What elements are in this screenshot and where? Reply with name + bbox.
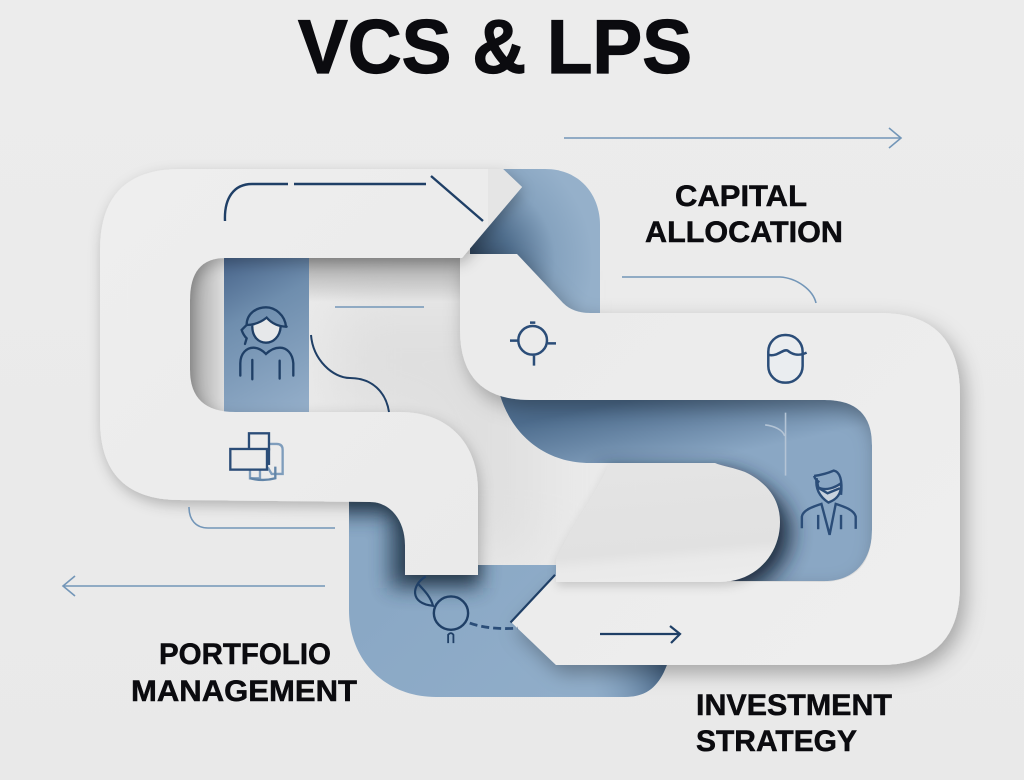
icon: businessman [802, 471, 856, 535]
label: capital allocation [645, 180, 843, 249]
icon: overlapping boxes [230, 433, 283, 480]
title: VCS & LPS [298, 5, 692, 90]
label: investment strategy [696, 689, 892, 758]
panel: white tongue [556, 463, 780, 582]
icon: target [510, 323, 556, 366]
arrow: inside lower band [600, 626, 680, 643]
label: portfolio management: PORTFOLIO [159, 638, 331, 671]
icon: bracket line with diagonal [225, 176, 483, 221]
label: portfolio management: MANAGEMENT [131, 675, 357, 708]
label: portfolio management [131, 638, 357, 708]
arrow: lower left [63, 576, 325, 596]
line: faint vertical mark [765, 413, 786, 476]
panel: lower white band [460, 254, 960, 665]
icon: pointed loop with dashed trail [415, 575, 555, 643]
panel: upper white band [100, 169, 522, 575]
connector: capital allocation [622, 277, 816, 303]
panel: blue channel top right [470, 169, 600, 330]
label: investment strategy: INVESTMENT [696, 689, 892, 722]
connector: lower left bracket [189, 507, 335, 528]
arrow: top right [564, 128, 901, 148]
line: inner short rule [335, 306, 424, 308]
label: capital allocation: ALLOCATION [645, 216, 843, 249]
panel: blue channel lower [349, 502, 667, 697]
panel: blue channel right [500, 396, 872, 581]
connector: curved line [311, 335, 389, 412]
label: capital allocation: CAPITAL [675, 180, 807, 213]
icon: woman [240, 307, 293, 379]
panel: inner cutout of top band [190, 258, 461, 412]
icon: head [768, 335, 807, 383]
label: investment strategy: STRATEGY [696, 725, 857, 758]
